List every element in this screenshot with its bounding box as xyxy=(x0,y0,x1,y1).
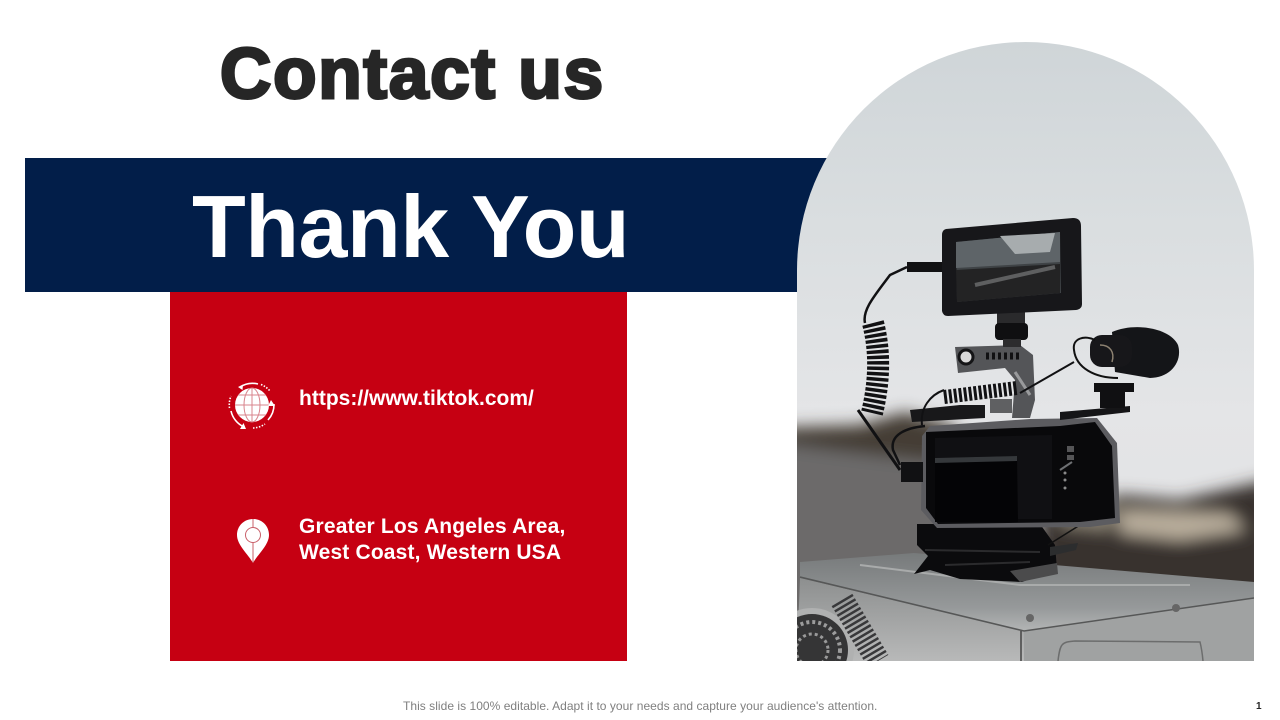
photo: camera rig in arch xyxy=(797,42,1254,661)
cables xyxy=(858,262,1074,470)
blurred landscape xyxy=(770,412,1270,620)
title: Contact us xyxy=(220,35,605,114)
text: website: https://www.tiktok.com/ xyxy=(299,387,534,410)
banner: navy band xyxy=(25,158,827,292)
text: address: West Coast, Western USA xyxy=(299,541,561,564)
camera rig base xyxy=(914,524,1080,582)
monitor mount xyxy=(995,311,1028,347)
shotgun microphone xyxy=(1074,327,1179,408)
top plates xyxy=(910,399,1130,422)
air conditioner unit xyxy=(797,553,1254,661)
text: address: Greater Los Angeles Area, xyxy=(299,515,565,538)
panel: contact details xyxy=(170,292,627,661)
camera body xyxy=(901,418,1120,528)
footer note: This slide is 100% editable. Adapt it to your needs and capture your audience's attention. xyxy=(403,699,877,713)
icon: location pin xyxy=(237,519,269,563)
top handle xyxy=(955,345,1035,418)
page number: 1 xyxy=(1256,701,1262,712)
heading: thank you: Thank You xyxy=(192,177,629,276)
monitor xyxy=(942,218,1082,316)
text: address xyxy=(299,515,565,564)
icon: globe xyxy=(228,382,275,429)
